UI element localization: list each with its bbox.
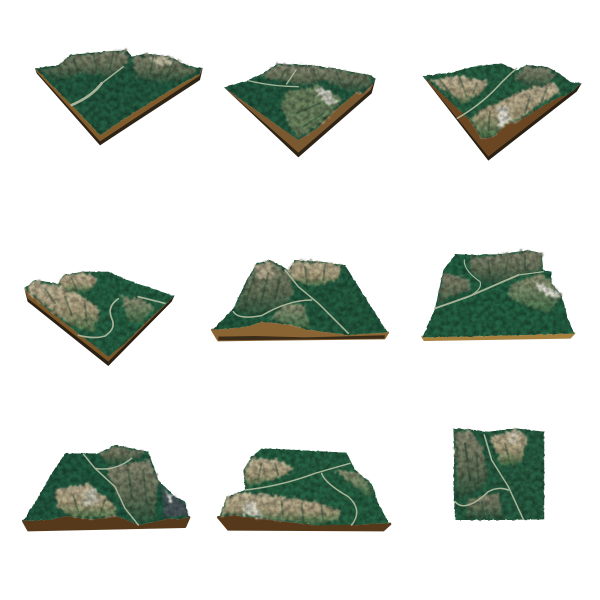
river — [72, 67, 123, 105]
soil side — [224, 78, 376, 157]
surface and slopes — [453, 428, 544, 520]
river — [78, 297, 165, 338]
soil side — [423, 76, 582, 161]
terrain block 5: middle-center — [212, 260, 388, 340]
surface and mountains — [212, 260, 388, 335]
surface and mountains — [224, 64, 376, 140]
river — [248, 70, 298, 87]
terrain block 7: bottom-left — [23, 445, 189, 530]
terrain block 6: middle-right — [422, 250, 574, 340]
river — [457, 68, 517, 118]
surface and mountains — [23, 445, 189, 525]
terrain block 3: top-right — [423, 63, 582, 161]
surface and mountains — [35, 50, 203, 135]
rivers — [233, 270, 348, 333]
rivers — [245, 463, 357, 525]
terrain block 9: bottom-right, top-down view — [453, 428, 544, 520]
surface and slopes — [220, 448, 389, 525]
surface and slopes — [423, 63, 582, 138]
soil side — [422, 333, 574, 340]
soil side — [24, 288, 174, 366]
soil side — [212, 322, 388, 340]
soil side — [35, 68, 203, 145]
rivers — [455, 435, 523, 519]
surface and slopes — [24, 272, 174, 357]
soil side — [218, 515, 390, 530]
terrain block 2: top-center — [224, 64, 376, 157]
rivers — [435, 260, 543, 308]
rivers — [83, 454, 138, 525]
terrain block 4: middle-left — [24, 272, 174, 366]
surface and slopes — [422, 250, 574, 337]
terrain block 8: bottom-center — [218, 448, 390, 530]
soil side — [23, 515, 189, 530]
terrain block 1: top-left — [35, 50, 203, 145]
